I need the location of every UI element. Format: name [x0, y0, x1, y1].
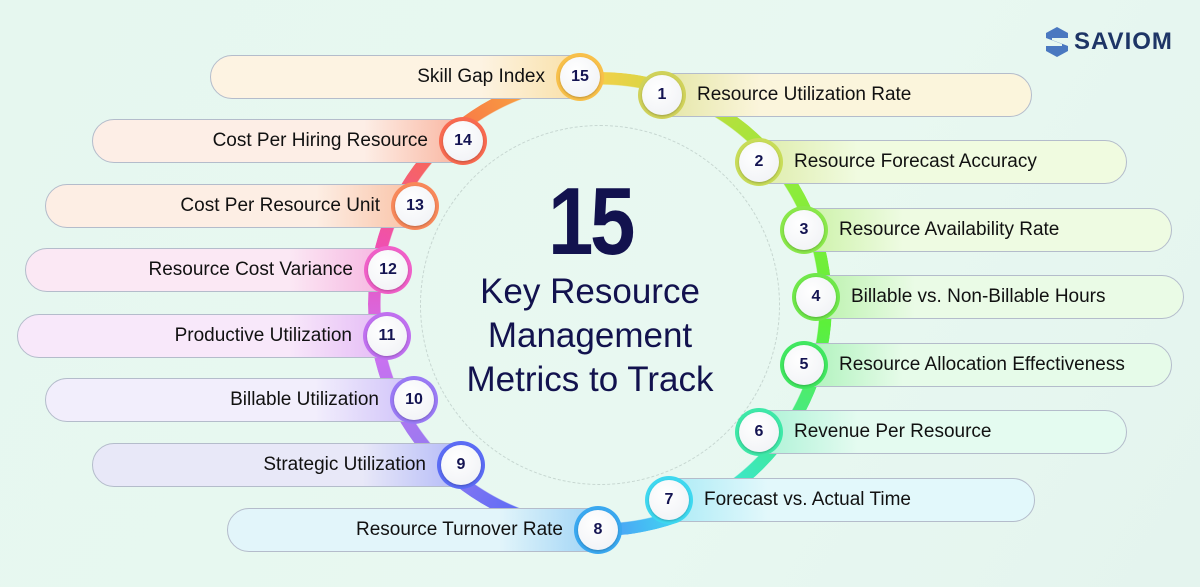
item 6: Revenue Per Resource [794, 421, 992, 442]
item 15: Skill Gap Index [417, 66, 545, 87]
item 12 [25, 248, 410, 292]
item 4: 4 [812, 288, 820, 305]
item 11: 11 [379, 327, 395, 344]
item 13: Cost Per Resource Unit [180, 195, 380, 216]
item 14 [92, 119, 485, 163]
item 8: Resource Turnover Rate [356, 519, 563, 540]
item 3: Resource Availability Rate [839, 219, 1059, 240]
item 7: 7 [665, 491, 673, 508]
item 8: 8 [594, 521, 602, 538]
item 13 [45, 184, 437, 228]
center title: Metrics to Track [466, 360, 713, 399]
item 13: 13 [406, 197, 424, 214]
item 11 [17, 314, 409, 358]
item 2: 2 [755, 153, 763, 170]
item 7: Forecast vs. Actual Time [704, 489, 911, 510]
item 6: 6 [755, 423, 763, 440]
item 4 [794, 275, 1184, 319]
item 2 [737, 140, 1127, 184]
item 1: Resource Utilization Rate [697, 84, 911, 105]
item 10 [45, 378, 436, 422]
item 12: 12 [379, 261, 397, 278]
item 3: 3 [800, 221, 808, 238]
item 7 [647, 478, 1035, 522]
item 15: 15 [571, 68, 589, 85]
item 6 [737, 410, 1127, 454]
item 3 [782, 208, 1172, 252]
item 15 [210, 55, 602, 99]
item 5: Resource Allocation Effectiveness [839, 354, 1125, 375]
dashed inner circle [420, 125, 780, 485]
center title: Key Resource [480, 272, 700, 311]
item 10: Billable Utilization [230, 389, 379, 410]
item 14: 14 [454, 132, 472, 149]
item 2: Resource Forecast Accuracy [794, 151, 1037, 172]
item 9: 9 [457, 456, 465, 473]
item 11: Productive Utilization [175, 325, 352, 346]
item 10: 10 [405, 391, 423, 408]
item 12: Resource Cost Variance [148, 259, 353, 280]
item 1: 1 [658, 86, 666, 103]
item 9: Strategic Utilization [263, 454, 426, 475]
item 5 [782, 343, 1172, 387]
center title [466, 168, 714, 399]
ring [368, 72, 832, 536]
item 5: 5 [800, 356, 808, 373]
item 8 [227, 508, 620, 552]
item 1 [640, 73, 1032, 117]
item 14: Cost Per Hiring Resource [213, 130, 428, 151]
logo: SAVIOM [1074, 28, 1173, 55]
center title: 15 [548, 168, 632, 275]
center title: Management [488, 316, 692, 355]
item 4: Billable vs. Non-Billable Hours [851, 286, 1106, 307]
item 9 [92, 443, 483, 487]
